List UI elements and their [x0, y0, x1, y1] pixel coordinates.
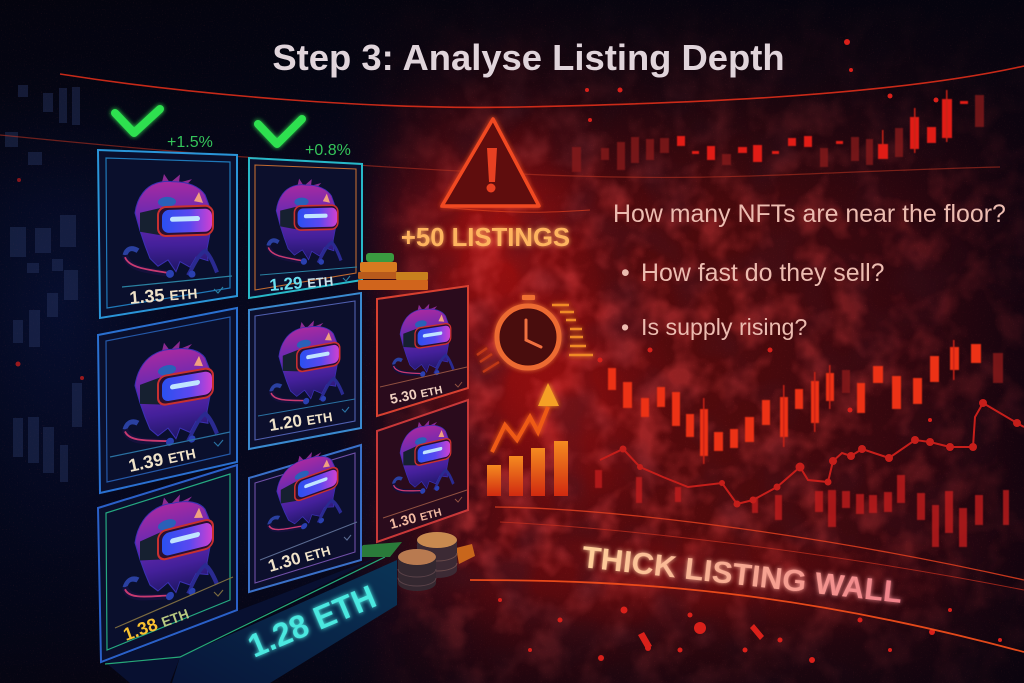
- rising arrow: [492, 383, 559, 452]
- left dim blue candlestick chart: [5, 85, 82, 482]
- card 1.30 right: 1.30 ETH: [388, 503, 443, 532]
- stopwatch icon: [477, 295, 593, 372]
- listings label: +50 LISTINGS: [401, 224, 570, 252]
- card 1.35: [98, 150, 237, 318]
- question 3: Is supply rising?: [641, 314, 807, 340]
- card 1.39: 1.39 ETH: [127, 442, 197, 476]
- check 1: [115, 109, 160, 133]
- question 1: How many NFTs are near the floor?: [613, 200, 1006, 228]
- growth bars icon: [487, 383, 568, 496]
- card 1.38: [98, 465, 237, 662]
- plinth: [105, 542, 402, 683]
- checkmarks and percentages: [115, 109, 351, 159]
- floor price: 1.28 ETH: [243, 578, 381, 664]
- card 5.30: [377, 286, 468, 416]
- lower-right chart bars: [595, 470, 1009, 547]
- card 1.20: [249, 293, 361, 449]
- card 1.29: 1.29 ETH: [269, 270, 334, 295]
- mid-right candlestick chart: [608, 340, 1003, 464]
- top-right candlestick chart: [572, 90, 984, 172]
- card 1.39: [98, 308, 237, 493]
- card 1.35: 1.35 ETH: [129, 282, 198, 308]
- card 1.38: 1.38 ETH: [121, 603, 191, 645]
- thick listing wall label: THICK LISTING WALL: [580, 539, 904, 610]
- card 5.30: 5.30 ETH: [388, 380, 444, 407]
- plus 1.5: +1.5%: [167, 134, 213, 151]
- red line chart with markers: [600, 399, 1024, 508]
- question 2: •: [621, 259, 630, 287]
- NFT card grid: [98, 150, 468, 662]
- title: Step 3: Analyse Listing Depth: [272, 37, 785, 78]
- question 2: How fast do they sell?: [641, 259, 884, 287]
- card 1.30: [249, 441, 361, 592]
- warning triangle: [442, 119, 539, 206]
- question block: [613, 200, 1006, 340]
- coin stack bottom: [398, 532, 475, 591]
- card 1.30: 1.30 ETH: [266, 540, 332, 576]
- card 1.29: [249, 158, 362, 298]
- card 1.20: 1.20 ETH: [268, 406, 334, 435]
- plus 0.8: +0.8%: [305, 142, 351, 159]
- question 3: •: [621, 314, 629, 340]
- card 1.30 right: [377, 400, 468, 542]
- check 2: [258, 119, 302, 144]
- coin stack top: [358, 253, 428, 290]
